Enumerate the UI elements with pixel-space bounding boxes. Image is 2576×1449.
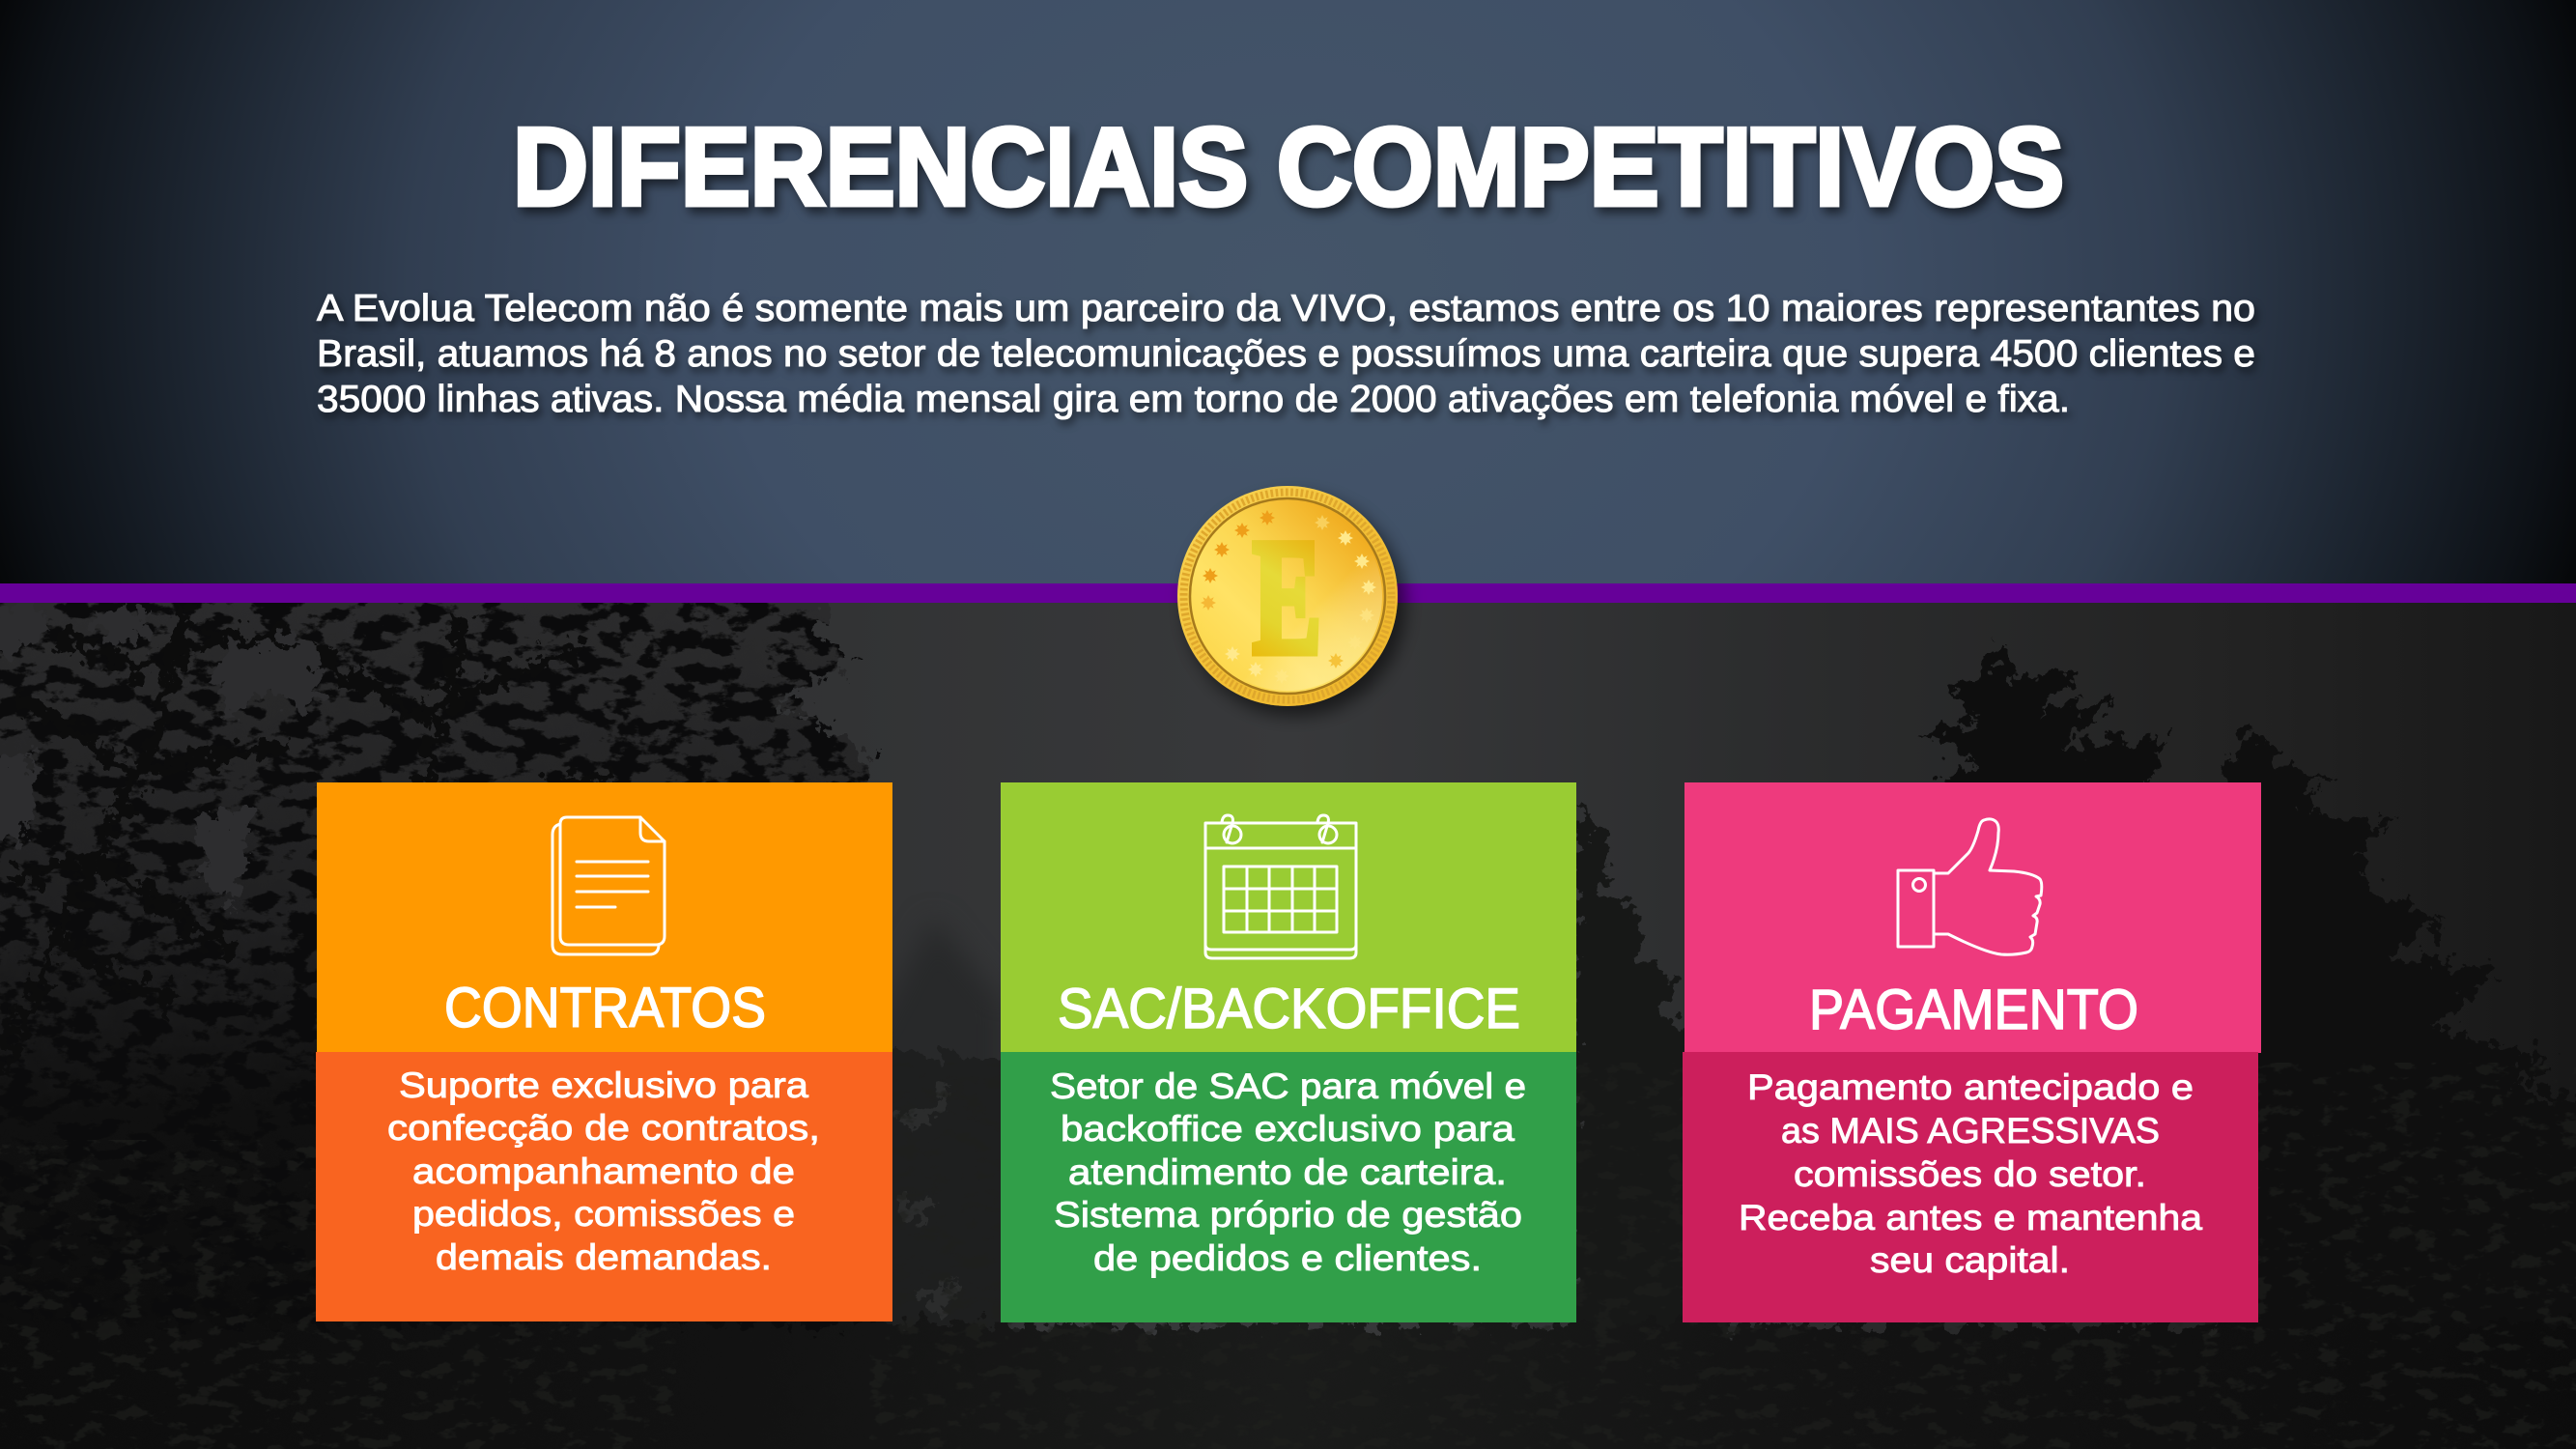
description: contratos: acompanhamento de (412, 1151, 795, 1191)
intro text block (317, 288, 2255, 420)
heading: pagamento: PAGAMENTO (1809, 979, 2138, 1041)
title: DIFERENCIAIS COMPETITIVOS (513, 106, 2064, 229)
description: contratos (387, 1065, 820, 1277)
description: sac/backoffice (1050, 1066, 1526, 1278)
description: contratos: pedidos, comissões e (412, 1194, 795, 1234)
heading: sac/backoffice: SAC/BACKOFFICE (1058, 978, 1520, 1040)
panel: forest photo background (0, 580, 2576, 1449)
description: sac/backoffice: backoffice exclusivo para (1061, 1109, 1514, 1149)
header block: sac/backoffice (1001, 782, 1576, 1053)
description: pagamento: comissões do setor. (1794, 1154, 2146, 1194)
tree A (1918, 638, 2172, 782)
description: sac/backoffice: de pedidos e clientes. (1093, 1238, 1482, 1278)
purple divider band (0, 583, 2576, 603)
panel: sac/backoffice (1001, 782, 1576, 1322)
left tree mass (0, 603, 875, 1339)
sky gaps in left tree (0, 607, 333, 903)
description: pagamento: as MAIS AGRESSIVAS (1781, 1111, 2160, 1151)
description: contratos: demais demandas. (436, 1237, 772, 1277)
panel: contratos (316, 782, 892, 1321)
panel: top gradient background (0, 0, 2576, 585)
icon: thumbs up (1898, 819, 2042, 954)
header block: pagamento (1684, 782, 2261, 1053)
description: pagamento: seu capital. (1870, 1240, 2070, 1280)
intro text block: A Evolua Telecom não é somente mais um parceiro da VIVO, estamos entre os 10 maiores representantes no (317, 288, 2255, 329)
icon: gold coin with E (1177, 486, 1398, 706)
right of centre tree (1576, 802, 1708, 1339)
foliage highlights (0, 1063, 2576, 1449)
description: pagamento: Receba antes e mantenha (1739, 1198, 2202, 1237)
icon: gold coin with E: E (1253, 506, 1321, 688)
description: contratos: Suporte exclusivo para (399, 1065, 808, 1105)
description: pagamento: Pagamento antecipado e (1747, 1067, 2194, 1107)
lower forest floor (0, 1323, 2576, 1449)
panel: pagamento (1683, 782, 2261, 1322)
header block: contratos (317, 782, 892, 1053)
left tree trunk and branches (0, 604, 618, 1067)
tree B (2209, 724, 2576, 1335)
heading: contratos: CONTRATOS (444, 977, 766, 1039)
description: contratos: confecção de contratos, (387, 1108, 820, 1148)
intro text block: Brasil, atuamos há 8 anos no setor de telecomunicações e possuímos uma carteira que supera 4500 clientes e (317, 333, 2255, 375)
mountain (892, 939, 1001, 1067)
icon: document (552, 817, 665, 954)
body block: pagamento (1683, 1052, 2258, 1322)
description: sac/backoffice: Setor de SAC para móvel e (1050, 1066, 1526, 1106)
description: pagamento (1739, 1067, 2202, 1280)
icon: calendar (1205, 815, 1356, 958)
body block: contratos (316, 1052, 892, 1321)
body block: sac/backoffice (1001, 1052, 1576, 1322)
description: sac/backoffice: atendimento de carteira. (1068, 1152, 1507, 1192)
description: sac/backoffice: Sistema próprio de gestão (1054, 1195, 1522, 1235)
intro text block: 35000 linhas ativas. Nossa média mensal gira em torno de 2000 ativações em telefonia móvel e fixa. (317, 379, 2070, 420)
